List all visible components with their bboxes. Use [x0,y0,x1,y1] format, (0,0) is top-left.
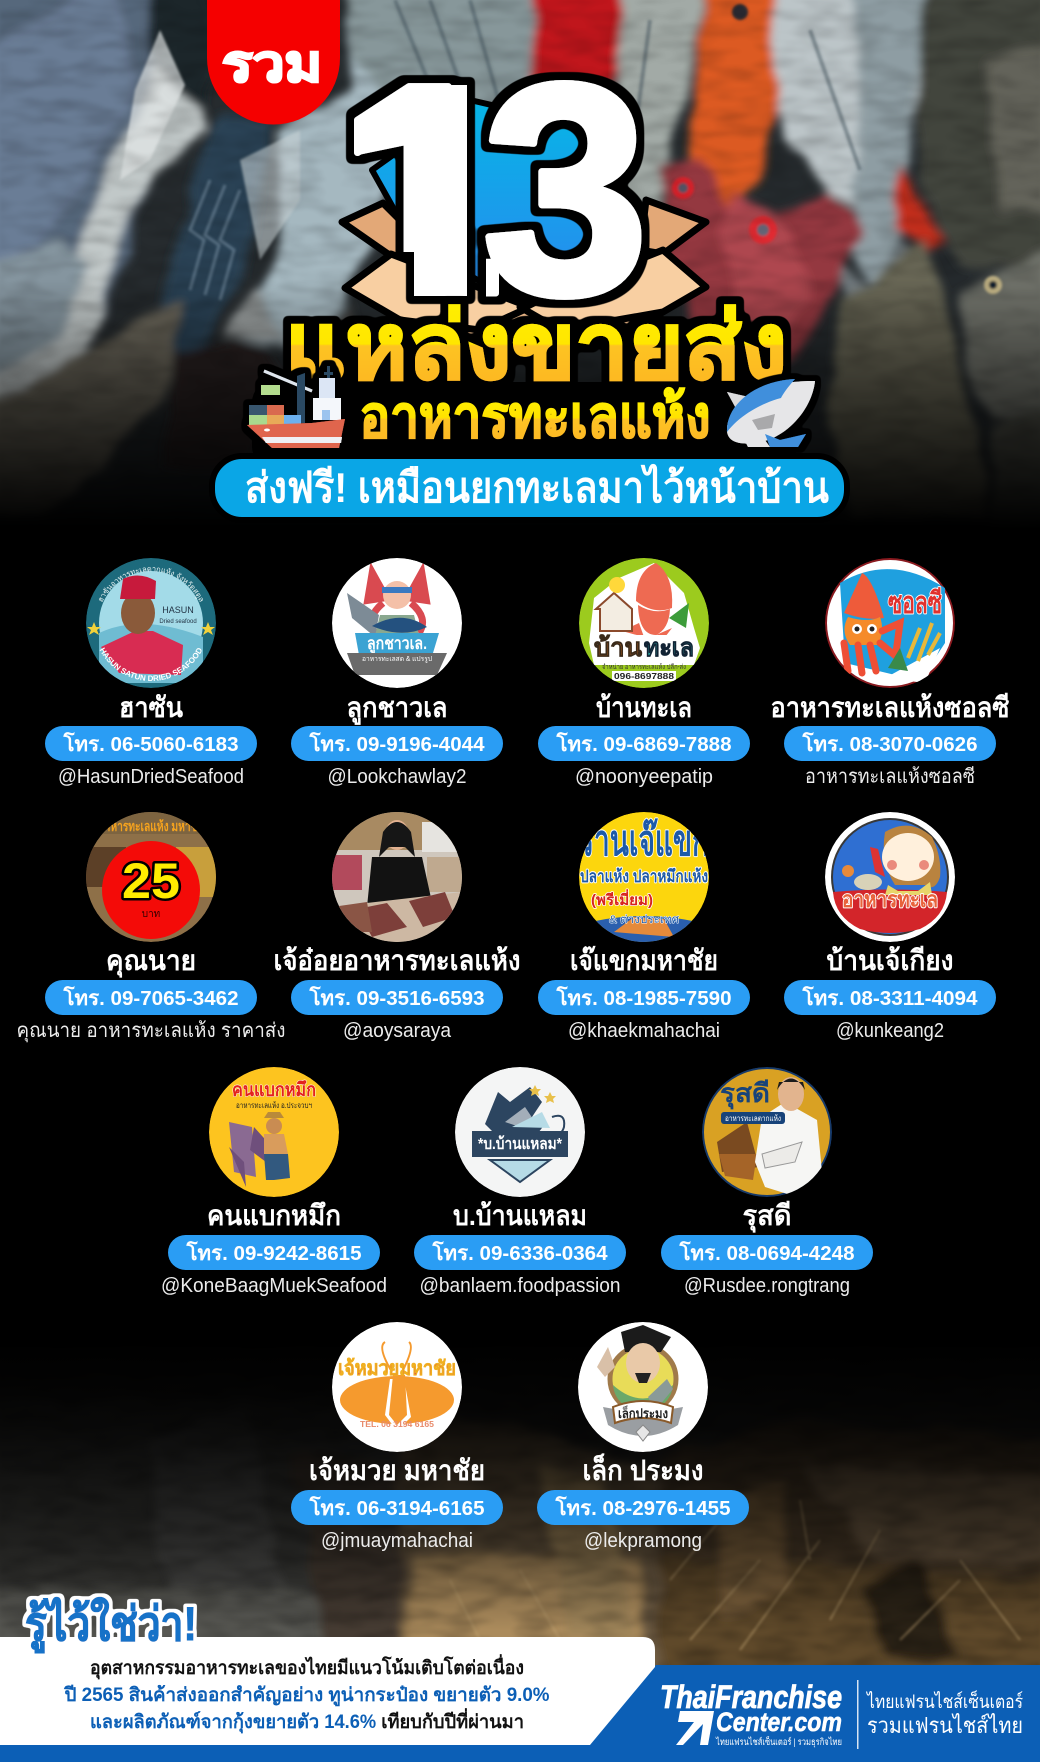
logo: Hasun: HASUN SATUN DRIED SEAFOOD [100,647,202,681]
logo: ลูกชาวเล: ลูกชาวเล. [367,634,427,655]
logo: ลูกชาวเล [332,558,462,688]
banner: ส่งฟรี [212,456,847,520]
phone pill: โทร. 09-9242-8615 [185,1240,362,1265]
phone pill: โทร. 08-3070-0626 [801,731,978,756]
card: รุสดี [661,1068,873,1297]
phone pill: โทร. 06-5060-6183 [62,731,239,756]
logo: ร้านเจ๊แขก [579,812,709,942]
name: บ.บ้านแหลม [453,1200,587,1231]
phone pill [45,980,257,1015]
name: อาหารทะเลแห้งซอลซี [770,692,1010,723]
box flaps [342,200,706,345]
handle: @noonyeepatip [575,766,713,788]
phone pill [45,726,257,761]
callout line 3: และผลิตภัณฑ์จากกุ้งขยายตัว 14.6% เทียบกับปีที่ผ่านมา [90,1708,524,1734]
handle: @aoysaraya [343,1020,452,1042]
phone pill [168,1235,380,1270]
phone pill: โทร. 08-1985-7590 [555,985,732,1010]
icon: cargo ship [247,366,345,448]
logo: ร้านเจ๊แขก: (พรีเมี่ยม) [591,889,653,909]
handle: @kunkeang2 [836,1020,944,1042]
logo: คนแบกหมึก: คนแบกหมึก [232,1079,316,1101]
phone pill [538,726,750,761]
logo: ร้านเจ๊แขก: ปลาแห้ง ปลาหมึกแห้ง [580,867,708,886]
logo: คุณนาย: บาท [142,909,160,920]
brand text [865,1689,1023,1738]
phone pill: โทร. 08-2976-1455 [554,1495,731,1520]
background lower black area [0,530,1040,1340]
card: เล็ก ประมง [537,1322,749,1552]
logo: ลูกชาวเล: อาหารทะเลสด & แปรรูป [362,656,433,663]
logo: เจ้หมวยมหาชัย [332,1322,462,1452]
card: บ.บ้านแหลม [414,1067,626,1297]
phone pill: โทร. 09-9196-4044 [308,731,485,756]
number 13 [346,72,650,308]
handle: @lekpramong [584,1530,702,1552]
logo: ซอลซี [826,559,954,687]
name: ฮาซัน [119,692,183,723]
card: คนแบกหมึก [161,1067,387,1297]
logo: Hasun: HASUN [162,605,194,615]
handle: @banlaem.foodpassion [420,1275,620,1297]
logo: คนแบกหมึก: อาหารทะเลแห้ง อ.ประจวบฯ [236,1101,312,1110]
card: ฮาซัน [45,558,257,788]
logo: บ.บ้านแหลม: *บ.บ้านแหลม* [478,1135,563,1153]
heading: แหล่งขายส่ง: แหล่งขายส่ง [285,296,787,398]
subheading: อาหารทะเลแห้ง: อาหารทะเลแห้ง [360,385,710,450]
logo: ร้านเจ๊แขก: & ต่างประเทศ [609,914,679,926]
logo: บ้านทะเล: ทะเล [644,634,694,662]
logo: รุสดี: อาหารทะเลตากแห้ง [725,1114,781,1123]
background photo: dried seafood [0,1340,1040,1762]
logo: ThaiFranchise Center [660,1679,842,1748]
name: บ้านทะเล [596,692,692,723]
handle: @khaekmahachai [568,1020,720,1042]
handle: คุณนาย อาหารทะเลแห้ง ราคาส่ง [16,1020,286,1043]
logo: บ้านทะเล: บ้าน [594,634,642,662]
background photo: fresh fish [0,0,1040,560]
card: ลูกชาวเล [291,558,503,788]
banner: ส่งฟรี: ส่งฟรี! เหมือนยกทะเลมาไว้หน้าบ้าน [245,463,829,511]
logo: อาหารทะเล girl [825,812,955,942]
badge: รวม [207,0,340,124]
logo: ThaiFranchise Center: ไทยแฟรนไชส์เซ็นเตอร์ | รวมธุรกิจไทย [715,1735,842,1748]
phone pill [538,980,750,1015]
logo: บ้านทะเล: จำหน่าย อาหารทะเลแห้ง ปลีก-ส่ง [602,663,686,671]
logo: Hasun [86,558,216,688]
card: บ้านเจ้เกียง [784,812,996,1042]
icon: tuna fish [727,379,815,447]
phone pill [784,726,996,761]
callout panel: fact text [0,1637,655,1745]
logo: คุณนาย: อาหารทะเลแห้ง มหาชัย [98,818,204,834]
handle: @Lookchawlay2 [328,766,466,788]
blue star burst [372,100,640,307]
card: บ้านทะเล [538,558,750,788]
phone pill [661,1235,873,1270]
phone pill: โทร. 06-3194-6165 [308,1495,485,1520]
logo: บ้านทะเล [579,558,709,688]
name: เจ้อ๋อยอาหารทะเลแห้ง [274,945,520,976]
footer blue band [0,1665,1040,1762]
card: เจ๊แขกมหาชัย [538,812,750,1042]
logo: คุณนาย: 25 [122,853,180,909]
phone pill: โทร. 08-0694-4248 [678,1240,855,1265]
title graphic: 13 in open box [338,72,710,334]
card: อาหารทะเลแห้งซอลซี [770,559,1010,788]
heading: รู้ไว้ใช่ว่า: รู้ไว้ใช่ว่า! [25,1596,197,1654]
logo: คนแบกหมึก [209,1067,339,1197]
phone pill: โทร. 09-7065-3462 [62,985,239,1010]
logo: เจ้หมวยมหาชัย: เจ้หมวยมหาชัย [338,1357,456,1380]
phone pill [291,1490,503,1525]
logo: เล็กประมง: เล็กประมง [618,1404,668,1421]
phone pill [414,1235,626,1270]
handle: @KoneBaagMuekSeafood [161,1275,387,1297]
black backing behind title lines [252,382,797,467]
logo: ThaiFranchise Center: ThaiFranchise [660,1679,842,1715]
logo: Hasun: Dried seafood [159,619,197,625]
logo: อาหารทะเล girl: อาหารทะเล [842,887,938,912]
card: เจ้อ๋อยอาหารทะเลแห้ง [274,812,520,1042]
brand text: รวมแฟรนไชส์ไทย [867,1713,1023,1738]
name: เจ้หมวย มหาชัย [309,1455,485,1486]
logo: Hasun: ฮาซันอาหารทะเลตากแห้ง จังหวัดสตูล [99,567,203,602]
name: ลูกชาวเล [346,692,448,725]
name: คุณนาย [106,945,196,978]
name: เจ๊แขกมหาชัย [570,945,718,976]
name: บ้านเจ้เกียง [826,945,954,976]
logo: ร้านเจ๊แขก: ร้านเจ๊แขก [579,817,709,864]
phone pill [784,980,996,1015]
divider [857,1680,858,1749]
handle: อาหารทะเลแห้งซอลซี [805,766,975,788]
handle: @jmuaymahachai [321,1530,473,1552]
phone pill [537,1490,749,1525]
logo: บ้านทะเล: 096-8697888 [614,672,675,681]
handle: @Rusdee.rongtrang [684,1275,850,1297]
phone pill: โทร. 09-6336-0364 [431,1240,608,1265]
badge: รวม: รวม [222,36,322,92]
logo: บ.บ้านแหลม [455,1067,585,1197]
logo: เล็กประมง [578,1322,708,1452]
phone pill [291,726,503,761]
phone pill [291,980,503,1015]
logo: คุณนาย [86,812,216,942]
logo: รุสดี: รุสดี [720,1078,770,1110]
handle: @HasunDriedSeafood [58,766,244,788]
number 13: 13 [337,21,649,357]
name: รุสดี [742,1200,792,1233]
phone pill: โทร. 08-3311-4094 [801,985,978,1010]
callout line 1: อุตสาหกรรมอาหารทะเลของไทยมีแนวโน้มเติบโตต่อเนื่อง [90,1654,524,1680]
icon: arrow [676,1711,714,1745]
card: เจ้หมวย มหาชัย [291,1322,503,1552]
logo: ThaiFranchise Center: Center.com [716,1707,842,1737]
logo: ซอลซี: ซอลซี [888,587,942,620]
card: คุณนาย [16,812,286,1043]
phone pill: โทร. 09-3516-6593 [308,985,485,1010]
logo: รุสดี [703,1068,831,1197]
name: เล็ก ประมง [582,1453,704,1486]
phone pill: โทร. 09-6869-7888 [555,731,732,756]
logo: เจ้หมวยมหาชัย: TEL. 06 3194 6165 [360,1420,435,1429]
callout line 2: ปี 2565 สินค้าส่งออกสำคัญอย่าง ทูน่ากระป๋อง ขยายตัว 9.0% [64,1684,550,1707]
name: คนแบกหมึก [207,1200,341,1231]
logo: shop photo [332,812,462,942]
